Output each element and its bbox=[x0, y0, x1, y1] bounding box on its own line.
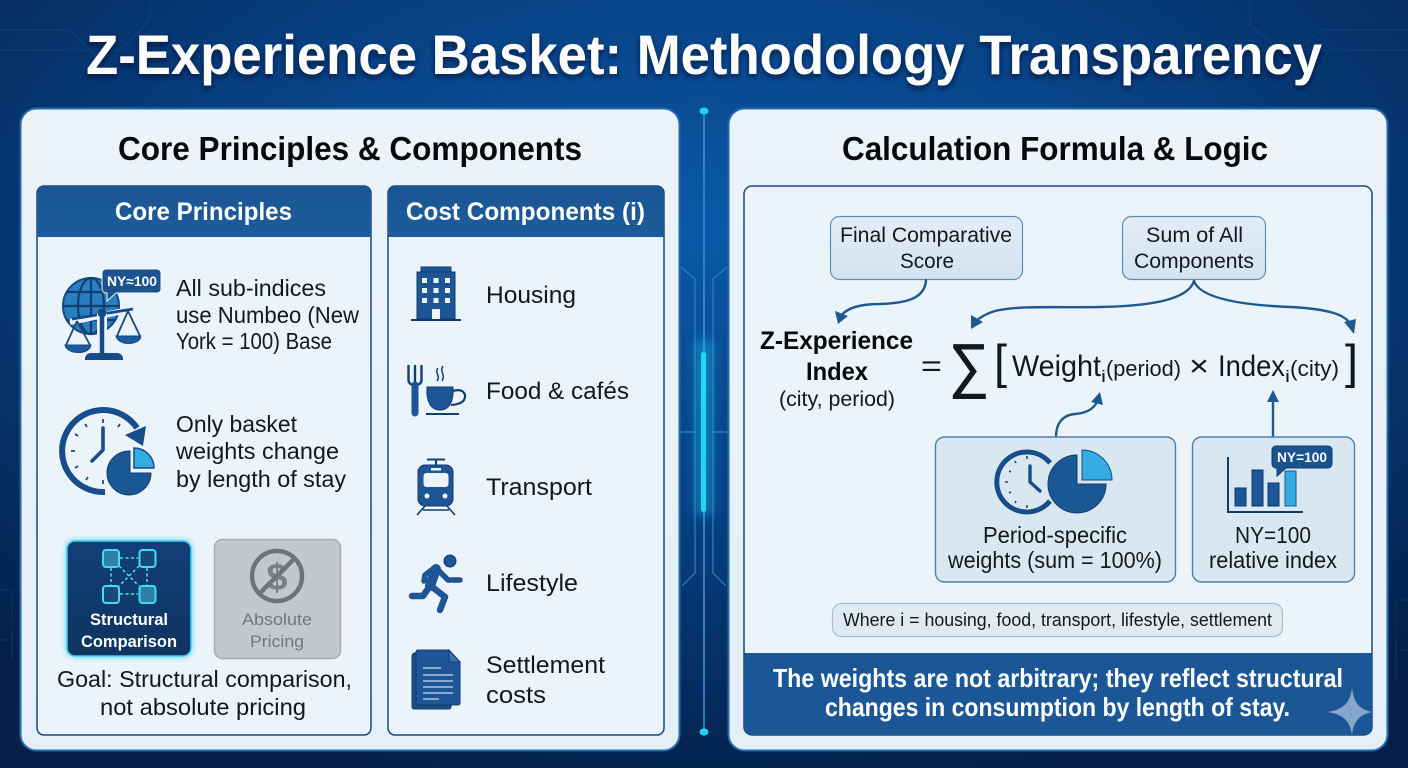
arrow: weights to formula bbox=[1056, 392, 1103, 437]
panel: calculation formula and logic bbox=[728, 108, 1388, 750]
icon: crossed-out dollar: $ bbox=[266, 557, 288, 599]
panel heading: Core Principles & Components bbox=[118, 130, 582, 167]
text: numbeo base bbox=[176, 275, 359, 354]
icon: runner bbox=[412, 555, 460, 610]
icon: globe and scales with NY badge: NY≈100 bbox=[107, 274, 157, 289]
callout: final comparative score bbox=[830, 216, 1022, 280]
text: numbeo base: use Numbeo (New bbox=[176, 302, 359, 328]
callout: sum of all components: Components bbox=[1134, 250, 1254, 273]
text: numbeo base: York = 100) Base bbox=[176, 328, 332, 354]
panel: core principles and components bbox=[20, 108, 680, 750]
formula: × bbox=[1189, 350, 1209, 383]
icon: train bbox=[417, 460, 455, 515]
label: settlement costs: Settlement bbox=[486, 652, 605, 679]
label: z-experience index: (city, period) bbox=[779, 388, 895, 411]
panel heading: Calculation Formula & Logic bbox=[842, 130, 1268, 167]
label: settlement costs: costs bbox=[486, 682, 546, 709]
sub-panel heading: Cost Components (i) bbox=[406, 198, 645, 226]
text: basket weights: weights change bbox=[175, 438, 339, 464]
card: absolute pricing: Absolute bbox=[242, 610, 312, 629]
formula: (city) bbox=[1290, 356, 1339, 381]
callout: sum of all components bbox=[1122, 216, 1266, 280]
text: numbeo base: All sub-indices bbox=[176, 275, 326, 301]
icon: sparkle bbox=[1328, 688, 1372, 735]
callout: sum of all components: Sum of All bbox=[1146, 224, 1243, 247]
card: relative index: NY=100 bbox=[1235, 522, 1311, 548]
arrow: score to index bbox=[835, 280, 926, 324]
icon: globe and scales with NY badge bbox=[63, 269, 161, 359]
formula: i bbox=[1101, 367, 1106, 386]
card: structural comparison: Structural bbox=[90, 610, 168, 629]
banner: takeaway bbox=[744, 653, 1372, 735]
note: where i: Where i = housing, food, transport, lifestyle, settlement bbox=[843, 610, 1272, 630]
card: structural comparison bbox=[66, 540, 192, 657]
label: z-experience index: Z-Experience bbox=[760, 327, 913, 355]
label: settlement costs bbox=[486, 652, 605, 709]
icon: building bbox=[411, 267, 461, 320]
label: housing: Housing bbox=[486, 282, 576, 309]
card: relative index: relative index bbox=[1209, 547, 1337, 573]
arrows: sum to formula bbox=[971, 281, 1356, 334]
sub-panel: core principles bbox=[37, 186, 371, 735]
title: Z-Experience Basket: Methodology Transparency bbox=[86, 23, 1322, 86]
icon: bar chart with NY badge: NY=100 bbox=[1277, 449, 1327, 465]
callout: final comparative score: Final Comparative bbox=[840, 224, 1012, 247]
icon: document stack bbox=[412, 650, 460, 709]
icon: clock with pie chart bbox=[62, 410, 154, 495]
formula: [ bbox=[994, 335, 1007, 388]
text: goal bbox=[57, 666, 352, 720]
card: period-specific weights: weights (sum = 100%) bbox=[947, 547, 1162, 573]
formula frame bbox=[744, 186, 1372, 735]
formula: Index bbox=[1218, 350, 1285, 383]
callout: final comparative score: Score bbox=[900, 250, 954, 273]
arrow: index to formula bbox=[1267, 390, 1279, 437]
text: goal: Goal: Structural comparison, bbox=[57, 666, 352, 692]
text: basket weights: Only basket bbox=[176, 411, 298, 437]
card: period-specific weights: Period-specific bbox=[983, 522, 1127, 548]
formula bbox=[921, 332, 1358, 399]
formula: Weight bbox=[1012, 350, 1102, 383]
card: period-specific weights bbox=[936, 437, 1176, 582]
card: absolute pricing: Pricing bbox=[250, 632, 304, 651]
text: basket weights: by length of stay bbox=[176, 466, 346, 492]
label: z-experience index: Index bbox=[806, 358, 868, 386]
sub-panel heading: Core Principles bbox=[115, 198, 292, 226]
label: lifestyle: Lifestyle bbox=[486, 570, 578, 597]
label: food and cafes: Food & cafés bbox=[486, 378, 629, 405]
label: transport: Transport bbox=[486, 474, 592, 501]
formula: ] bbox=[1345, 335, 1358, 388]
banner: takeaway: changes in consumption by length of stay. bbox=[825, 692, 1290, 722]
icon: bar chart with NY badge bbox=[1228, 446, 1332, 512]
card: absolute pricing bbox=[214, 540, 340, 658]
banner: takeaway: The weights are not arbitrary; they reflect structural bbox=[773, 663, 1343, 693]
formula: (period) bbox=[1106, 356, 1181, 381]
text: goal: not absolute pricing bbox=[100, 694, 306, 720]
sub-panel: cost components bbox=[388, 186, 664, 735]
label: z-experience index bbox=[760, 327, 913, 411]
formula: ∑ bbox=[949, 332, 989, 399]
text: basket weights bbox=[175, 411, 346, 492]
card: relative index bbox=[1192, 437, 1354, 582]
centre connector bbox=[681, 108, 727, 736]
icon: fork and coffee cup bbox=[408, 366, 465, 414]
icon: clock and pie bbox=[997, 450, 1112, 513]
note: where i bbox=[832, 604, 1282, 636]
formula: i bbox=[1285, 367, 1290, 386]
icon: connected nodes bbox=[103, 550, 156, 603]
formula: = bbox=[921, 350, 942, 383]
card: structural comparison: Comparison bbox=[81, 632, 177, 651]
